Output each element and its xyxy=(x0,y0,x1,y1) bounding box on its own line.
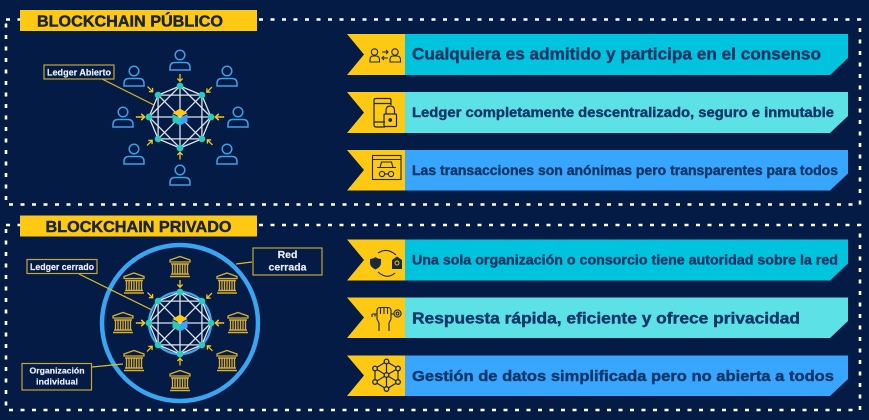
ribbon: una sola organización: Una sola organización o consorcio tiene autoridad sobre la red xyxy=(412,252,838,268)
callout: red cerrada: Red xyxy=(278,249,297,261)
callout: organización individual: Organización xyxy=(30,366,84,376)
arrows toward ledger xyxy=(136,280,224,366)
icon: hand holding key xyxy=(372,308,401,331)
ribbon: una sola organización xyxy=(347,240,848,280)
heading: blockchain privado: BLOCKCHAIN PRIVADO xyxy=(46,219,232,236)
callout: ledger cerrado: Ledger cerrado xyxy=(30,262,94,273)
callout: organización individual xyxy=(22,364,123,390)
callout: ledger cerrado xyxy=(27,260,152,310)
arrows toward ledger xyxy=(136,74,224,160)
network graph xyxy=(146,289,214,357)
icon: shield and tag cycle xyxy=(370,250,402,276)
icon: data hexagon network xyxy=(373,359,400,391)
callout: red cerrada: cerrada xyxy=(269,262,307,274)
ribbon: cualquiera xyxy=(347,34,848,75)
ribbon: respuesta rápida: Respuesta rápida, eficiente y ofrece privacidad xyxy=(412,310,800,328)
diagram: open network xyxy=(44,50,248,185)
icon: exchange between people xyxy=(370,49,400,62)
heading: blockchain público xyxy=(20,10,257,31)
inner ring xyxy=(149,292,211,354)
ribbon: ledger descentralizado xyxy=(347,92,848,133)
ribbon: cualquiera: Cualquiera es admitido y participa en el consenso xyxy=(412,44,821,64)
callout: ledger abierto xyxy=(44,65,154,105)
participants xyxy=(113,50,248,185)
ribbon: ledger descentralizado: Ledger completamente descentralizado, seguro e inmutable xyxy=(412,105,835,120)
network graph xyxy=(146,83,214,151)
outer ring: closed network xyxy=(102,245,258,401)
callout: organización individual: individual xyxy=(36,376,78,386)
diagram: closed network xyxy=(22,245,322,401)
heading: blockchain privado xyxy=(20,216,257,236)
ribbon: transacciones anónimas: Las transacciones son anónimas pero transparentes para todos xyxy=(412,163,838,178)
panel: blockchain público xyxy=(6,10,860,204)
ribbon: transacciones anónimas xyxy=(347,150,848,190)
callout: ledger abierto: Ledger Abierto xyxy=(47,68,111,78)
ribbon: gestión de datos xyxy=(347,356,848,396)
callout: red cerrada xyxy=(236,248,322,275)
heading: blockchain público: BLOCKCHAIN PÚBLICO xyxy=(37,12,223,30)
icon: phone with padlock xyxy=(374,98,396,127)
ribbon: respuesta rápida xyxy=(347,298,848,338)
organizations xyxy=(113,256,248,390)
panel: blockchain privado xyxy=(6,216,860,410)
icon: incognito browser xyxy=(372,156,401,180)
ribbon: gestión de datos: Gestión de datos simplificada pero no abierta a todos xyxy=(412,369,834,385)
